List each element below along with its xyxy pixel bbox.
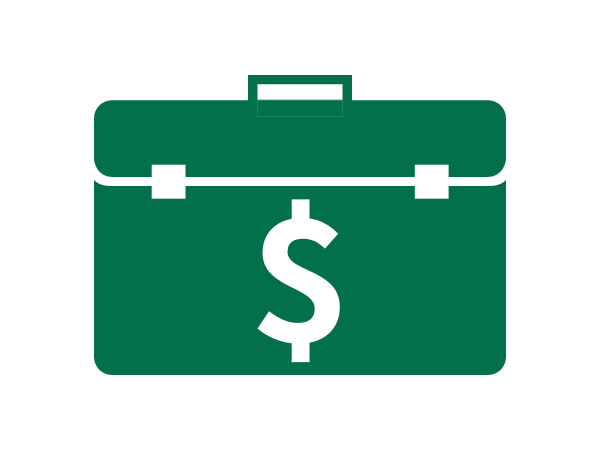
white seam band xyxy=(94,160,506,186)
icon: briefcase xyxy=(94,75,506,389)
briefcase body xyxy=(94,100,506,375)
briefcase handle xyxy=(248,75,352,101)
right clasp xyxy=(415,165,449,199)
left clasp xyxy=(152,165,186,199)
handle inner outline xyxy=(258,100,342,116)
dollar sign: $ xyxy=(250,147,351,389)
